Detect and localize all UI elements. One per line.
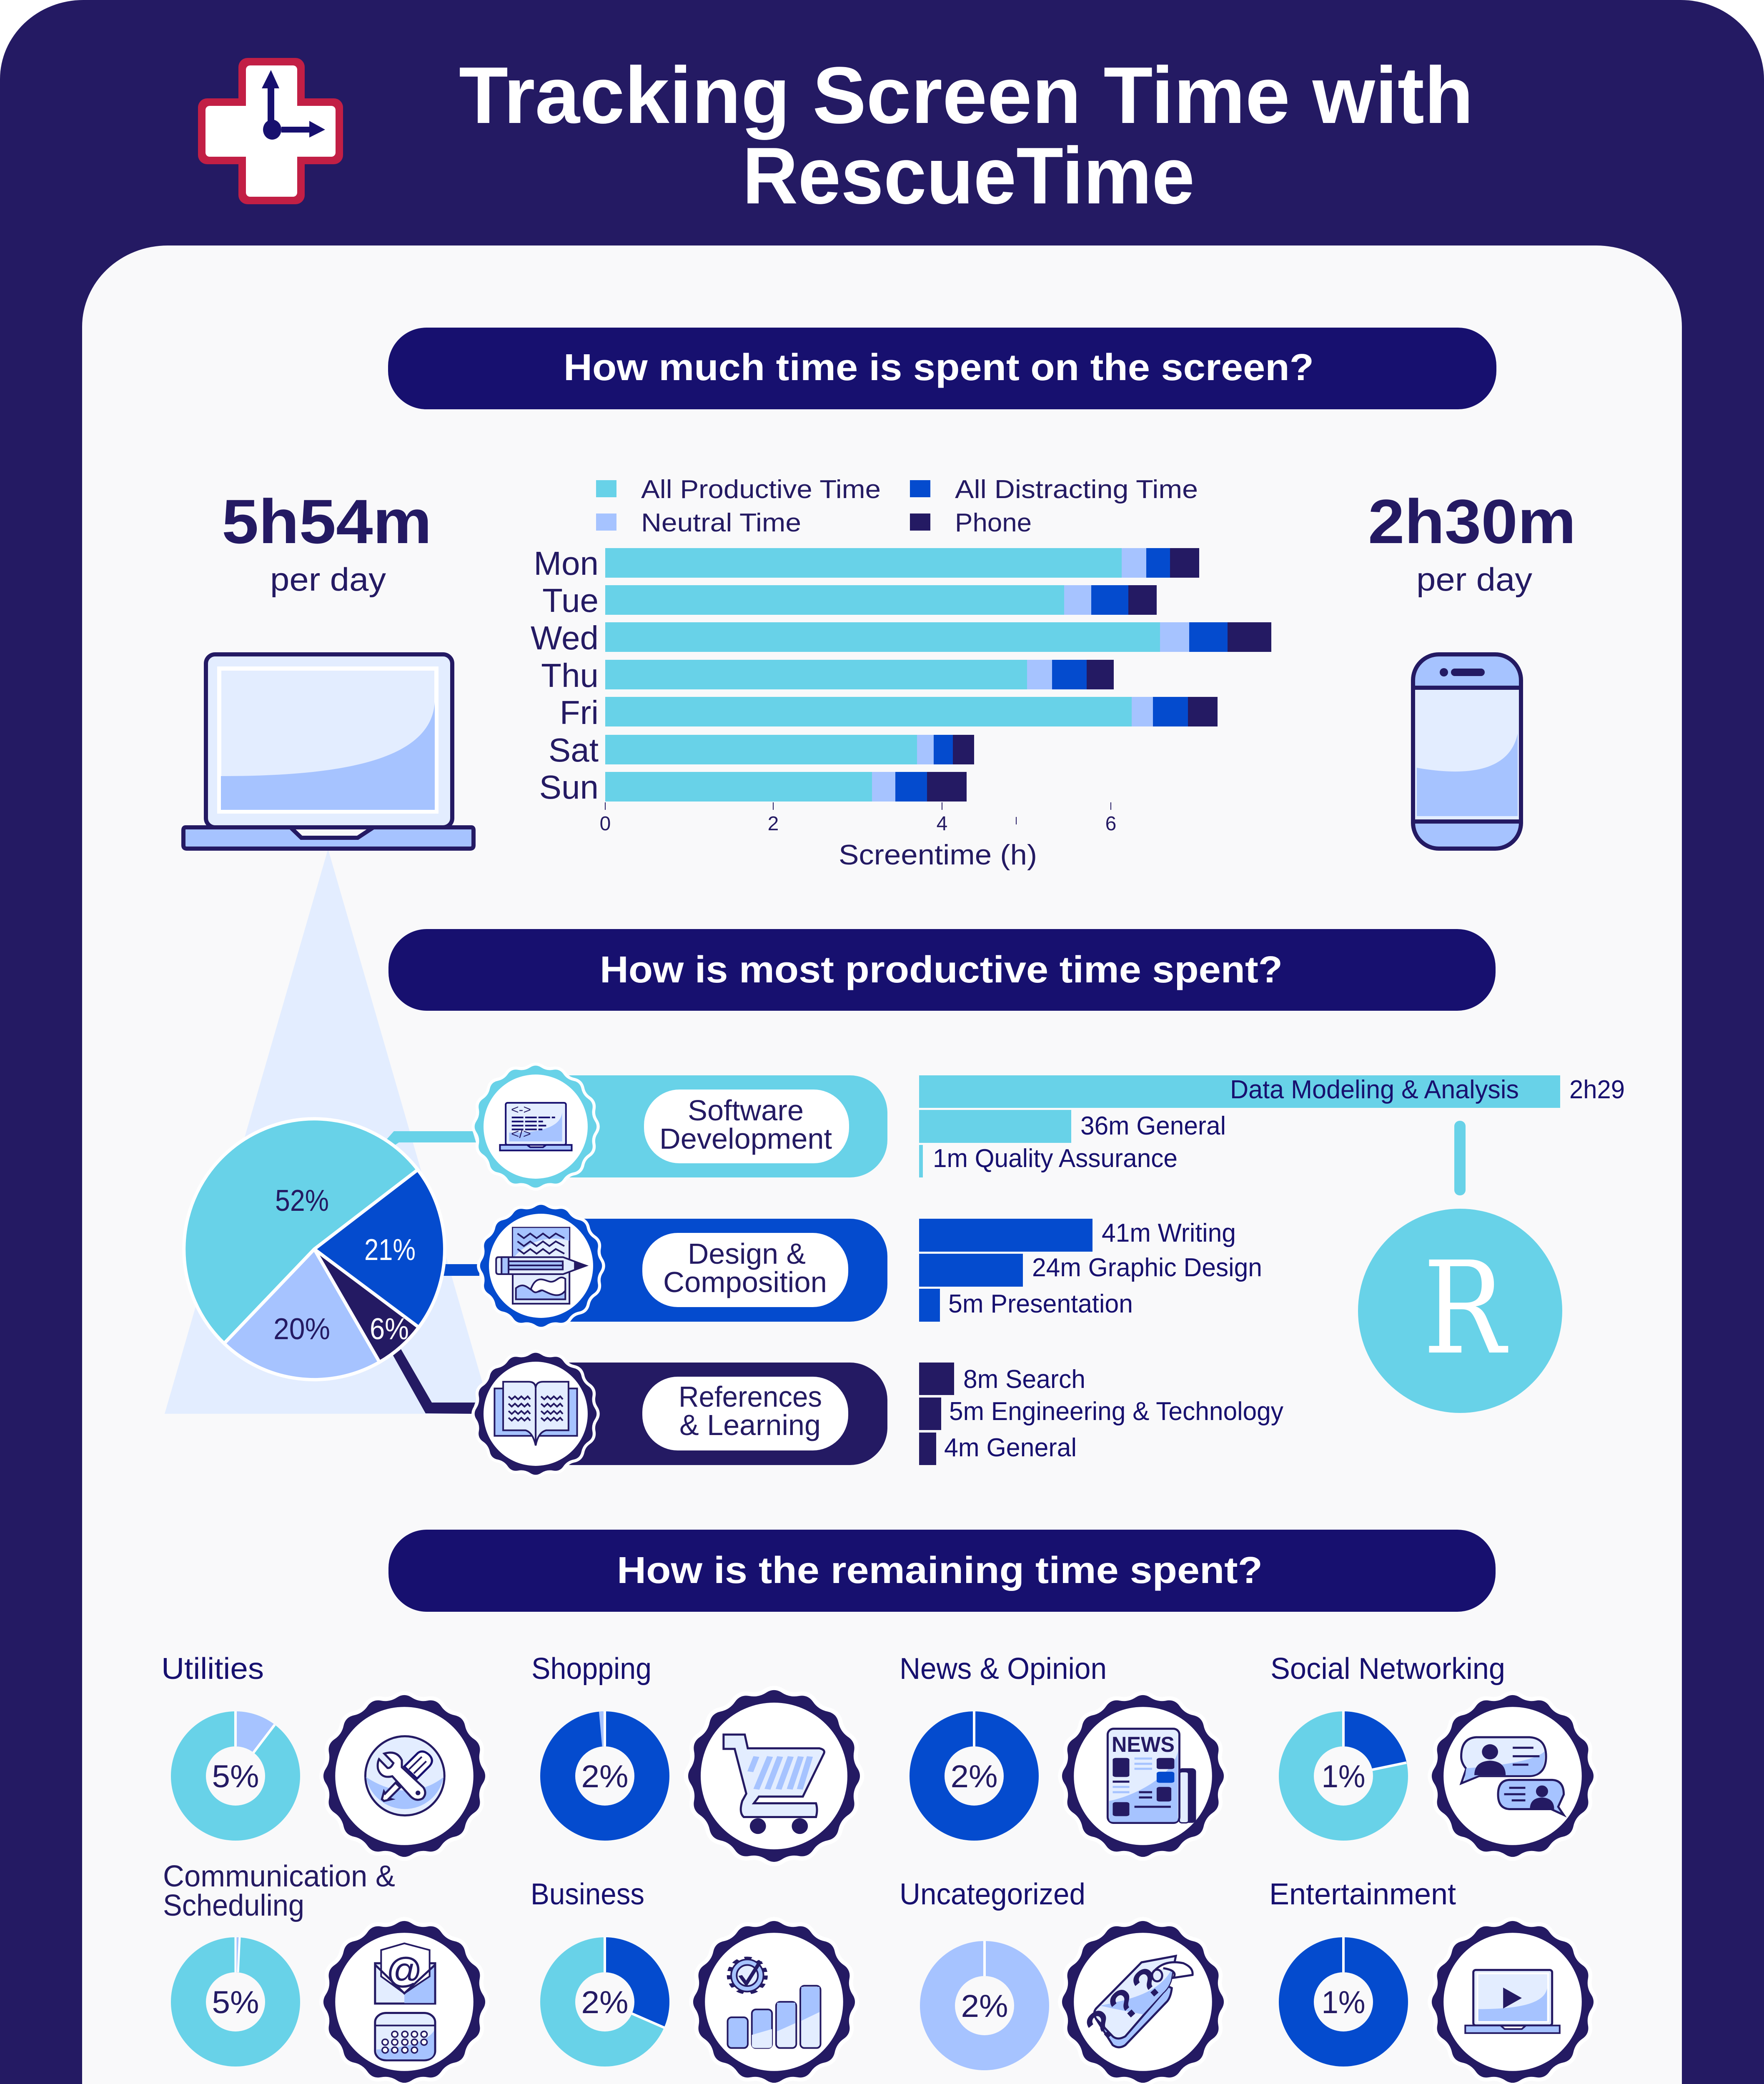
donut: communication: [188, 1937, 283, 2049]
connector: blue: [442, 1264, 479, 1276]
bars: design and composition: [919, 1219, 1262, 1322]
icon: code laptop: </>: [511, 1127, 531, 1141]
panel: references and learning: [475, 1353, 887, 1475]
donut: entertainment: 1%: [1321, 1985, 1366, 2020]
icon: tools: [365, 1736, 444, 1816]
legend: Neutral Time: [641, 508, 801, 537]
bars: software development: 2h29: [1569, 1075, 1625, 1104]
stat: computer time per day: 5h54m: [222, 486, 432, 556]
category: business: Business: [531, 1878, 644, 1911]
stat: phone time per day: 2h30m: [1368, 486, 1576, 556]
category: utilities: Utilities: [161, 1652, 264, 1686]
category: news and opinion: [900, 1652, 1224, 1857]
bars: design and composition: 5m Presentation: [948, 1290, 1133, 1318]
stat: computer time per day: [222, 486, 432, 598]
donut: social: 1%: [1321, 1759, 1366, 1794]
row: Sat: [549, 731, 974, 769]
row: Wed: [531, 619, 1271, 656]
panel: software development: Software: [688, 1094, 804, 1127]
bars: software development: 36m General: [1080, 1112, 1226, 1140]
donut: communication: 5%: [212, 1985, 259, 2020]
x axis: [600, 802, 1116, 871]
row: Mon: Mon: [534, 545, 599, 582]
bars: references and learning: 5m Engineering & Technology: [949, 1397, 1283, 1426]
row: Sun: [539, 769, 967, 806]
icon: R logo: R: [1423, 1235, 1508, 1383]
pie chart: productive time: 21%: [364, 1233, 416, 1267]
category: social networking: [1270, 1652, 1594, 1857]
row: Wed: Wed: [531, 619, 599, 656]
category: entertainment: Entertainment: [1269, 1878, 1456, 1911]
heading: remaining time: [388, 1530, 1496, 1612]
category: uncategorized: [900, 1878, 1224, 2083]
donut: news: 2%: [950, 1759, 998, 1794]
donut: uncategorized: 2%: [961, 1989, 1008, 2024]
legend: All Distracting Time: [955, 475, 1198, 504]
icon: chat bubbles: [1461, 1737, 1564, 1815]
panel: software development: Development: [659, 1122, 832, 1155]
pie chart: productive time: 6%: [370, 1313, 409, 1346]
x axis: 4: [937, 813, 947, 835]
icon: question mark tag: ???: [1076, 1954, 1177, 2051]
icon: phone: [1413, 654, 1521, 849]
pie chart: productive time: [184, 1119, 445, 1380]
row: Fri: [560, 694, 1218, 731]
donut: social: [1296, 1711, 1406, 1823]
row: Tue: [542, 582, 1157, 619]
icon: open book: [494, 1382, 577, 1445]
title: Tracking Screen Time with: [459, 50, 1473, 140]
panel: design and composition: [480, 1205, 887, 1327]
icon: gear and bar growth: [728, 1958, 821, 2048]
pie chart: productive time: 52%: [275, 1184, 329, 1217]
icon: code laptop: <->: [511, 1103, 531, 1117]
stacked bar chart: screen time by day: [531, 545, 1271, 871]
title: RescueTime: [742, 130, 1195, 220]
category: entertainment: [1269, 1878, 1594, 2083]
row: Tue: Tue: [542, 582, 599, 619]
heading: screen time: [388, 328, 1496, 409]
title: [459, 50, 1473, 220]
legend: Phone: [955, 508, 1032, 537]
heading: remaining time: How is the remaining time spent?: [617, 1550, 1263, 1591]
donut: news: [927, 1711, 1021, 1823]
icon: R logo: [1358, 1209, 1562, 1413]
pie chart: productive time: 20%: [273, 1313, 330, 1346]
category: social networking: Social Networking: [1270, 1652, 1505, 1686]
bars: references and learning: 4m General: [944, 1433, 1077, 1462]
row: Thu: Thu: [541, 657, 599, 694]
donut: shopping: [554, 1711, 656, 1827]
heading: productive time: [388, 929, 1496, 1011]
panel: references and learning: References: [679, 1380, 822, 1413]
x axis: Screentime (h): [839, 839, 1037, 871]
connector: data modeling to R: [1454, 1121, 1466, 1195]
x axis: 6: [1105, 813, 1116, 835]
category: shopping: [531, 1652, 860, 1862]
category: communication and scheduling: Scheduling: [163, 1889, 304, 1922]
icon: shopping cart: [724, 1735, 824, 1834]
panel: design and composition: Composition: [663, 1266, 827, 1298]
header logo: clock cross: [198, 58, 343, 204]
bars: design and composition: 24m Graphic Design: [1032, 1253, 1262, 1282]
category: communication and scheduling: Communication &: [163, 1860, 395, 1893]
panel: references and learning: & Learning: [679, 1409, 821, 1441]
category: communication and scheduling: [163, 1860, 485, 2083]
donut: shopping: 2%: [581, 1759, 629, 1794]
category: uncategorized: Uncategorized: [900, 1878, 1085, 1911]
icon: video laptop: [1465, 1970, 1560, 2033]
x axis: 0: [600, 813, 611, 835]
connector: navy: [393, 1349, 475, 1414]
donut: utilities: [188, 1711, 283, 1823]
bars: references and learning: [919, 1363, 1283, 1465]
icon: newspaper: NEWS: [1112, 1733, 1175, 1757]
category: business: [531, 1878, 855, 2083]
donut: business: 2%: [581, 1985, 629, 2020]
row: Sat: Sat: [549, 731, 599, 769]
light beam from laptop to pie: [165, 849, 491, 1414]
stat: computer time per day: per day: [270, 561, 386, 598]
legend: [596, 475, 1198, 537]
bars: design and composition: 41m Writing: [1102, 1219, 1236, 1247]
donut: uncategorized: [937, 1941, 1032, 2053]
donut: entertainment: [1296, 1937, 1391, 2049]
heading: productive time: How is most productive time spent?: [600, 949, 1283, 991]
icon: email and calendar: [375, 1944, 435, 2060]
donut: business: [558, 1937, 664, 2049]
x axis: 2: [768, 813, 779, 835]
category: news and opinion: News & Opinion: [900, 1652, 1107, 1686]
icon: code laptop: [500, 1103, 572, 1150]
icon: newspaper: [1108, 1729, 1196, 1823]
bars: software development: 1m Quality Assurance: [933, 1144, 1178, 1173]
icon: laptop: [183, 654, 474, 849]
row: Mon: [534, 545, 1199, 582]
bars: software development: [919, 1075, 1625, 1177]
stat: phone time per day: per day: [1416, 561, 1532, 598]
stat: phone time per day: [1368, 486, 1576, 598]
row: Sun: Sun: [539, 769, 599, 806]
legend: All Productive Time: [641, 475, 881, 504]
panel: design and composition: Design &: [688, 1237, 806, 1270]
category: shopping: Shopping: [531, 1652, 651, 1686]
donut: utilities: 5%: [212, 1759, 259, 1794]
panel: software development: [475, 1066, 887, 1187]
icon: pencil and document: [496, 1227, 586, 1304]
row: Fri: Fri: [560, 694, 599, 731]
bars: software development: Data Modeling & Analysis: [1230, 1075, 1519, 1104]
category: utilities: [161, 1652, 485, 1857]
row: Thu: [541, 657, 1114, 694]
icon: email and calendar: @: [386, 1951, 423, 1991]
heading: screen time: How much time is spent on the screen?: [564, 347, 1314, 388]
connector: cyan: [387, 1131, 476, 1145]
bars: references and learning: 8m Search: [963, 1365, 1085, 1394]
